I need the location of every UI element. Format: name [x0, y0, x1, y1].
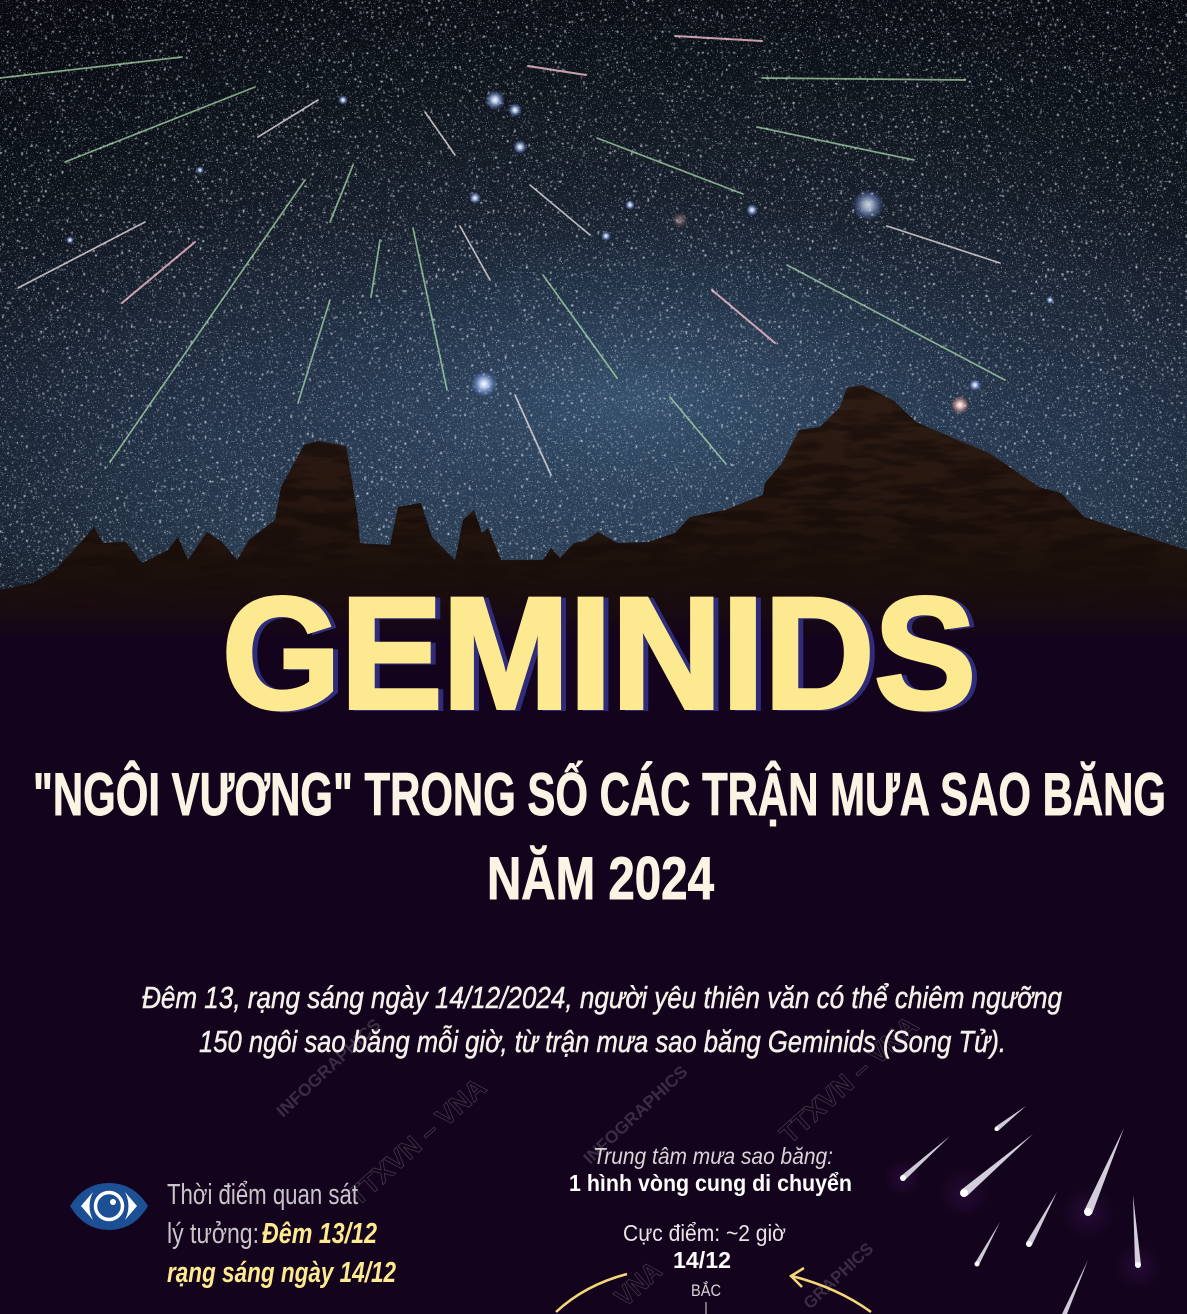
title: GEMINIDS: GEMINIDS: [227, 565, 981, 743]
viewing time text: [167, 1179, 396, 1289]
meteor streaks: [0, 36, 1005, 475]
radiant center text: BẮC: [691, 1281, 721, 1300]
viewing time text: Thời điểm quan sát: [167, 1179, 358, 1211]
viewing time text: Đêm 13/12: [262, 1218, 377, 1250]
hero photo: night sky with meteor shower: [0, 0, 1187, 640]
sky background: [0, 0, 1187, 640]
fine stars: [0, 0, 1187, 600]
watermark: INFOGRAPHICS: [580, 1062, 691, 1168]
intro text: [142, 980, 1062, 1059]
radiant center text: 1 hình vòng cung di chuyển: [569, 1170, 852, 1196]
milky way glow: [120, 170, 1160, 630]
watermark: VNA: [609, 1255, 668, 1312]
bright stars: [66, 90, 1054, 414]
radiant center text: Trung tâm mưa sao băng:: [593, 1143, 833, 1169]
sky vignette: [0, 0, 1187, 640]
watermark: INFOGRAPHICS: [273, 1015, 384, 1121]
watermark: [273, 1010, 924, 1313]
watermark: GRAPHICS: [800, 1239, 877, 1313]
subtitle: [33, 761, 1166, 912]
arc arrows: [556, 1268, 871, 1312]
falling meteors illustration: [883, 1106, 1162, 1314]
watermark: TTXVN – VNA: [774, 1010, 924, 1149]
star field: [0, 0, 1187, 600]
compass north line: [705, 1302, 707, 1314]
radiant center text: [569, 1143, 852, 1300]
subtitle: NĂM 2024: [487, 845, 714, 912]
title: GEMINIDS: GEMINIDS: [222, 564, 976, 742]
icon: eye: [70, 1183, 148, 1230]
radiant center text: Cực điểm: ~2 giờ: [623, 1220, 786, 1246]
mountain silhouette: [0, 380, 1187, 640]
watermark: TTXVN – VNA: [342, 1072, 492, 1211]
radiant center text: 14/12: [673, 1247, 731, 1273]
intro text: 150 ngôi sao băng mỗi giờ, từ trận mưa sao băng Geminids (Song Tử).: [199, 1024, 1006, 1059]
viewing time text: lý tưởng:: [167, 1218, 259, 1250]
viewing time text: rạng sáng ngày 14/12: [167, 1257, 396, 1289]
